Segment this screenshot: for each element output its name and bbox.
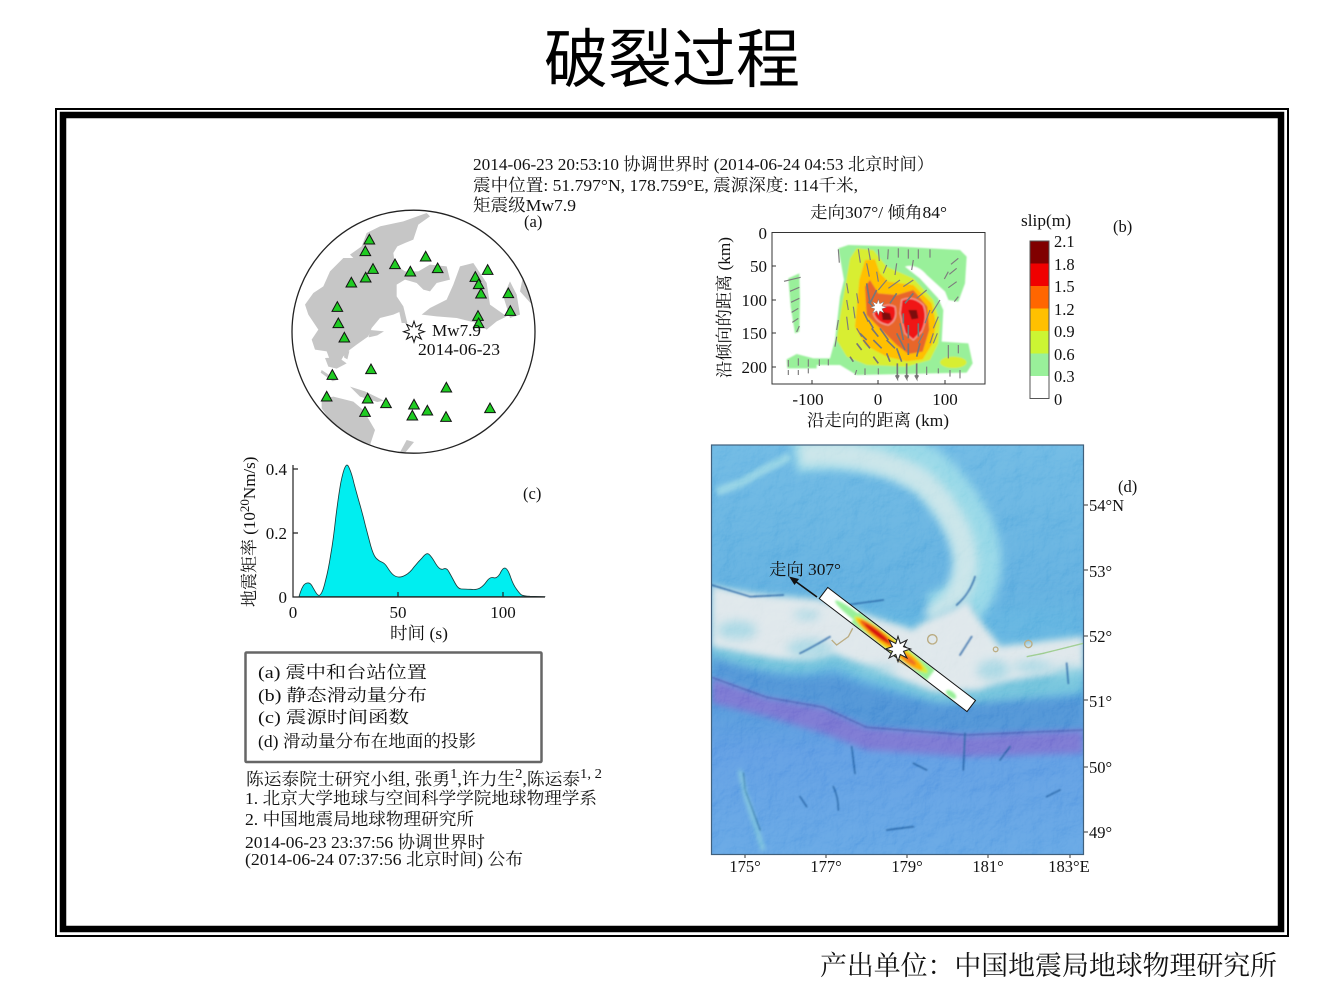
slip plot axes — [715, 224, 985, 430]
icon: epicenter star on strip — [885, 636, 911, 662]
axis labels: 100 — [490, 603, 516, 622]
slip colour legend: 0 — [1054, 390, 1062, 409]
author credits — [245, 767, 602, 869]
axis labels: 0.2 — [266, 524, 287, 543]
title: 破裂过程 — [544, 9, 800, 101]
axis labels: 50 — [390, 603, 406, 622]
axis labels: 0 — [289, 603, 297, 622]
aleutian shelf — [712, 585, 1083, 692]
slip plot axes: 沿走向的距离 (km) — [807, 411, 949, 430]
slip colour legend — [1021, 211, 1075, 409]
slip plot axes: 沿倾向的距离 (km) — [715, 237, 734, 378]
panel a: epicenter and station map — [292, 210, 542, 455]
legend box: panel descriptions — [246, 652, 542, 762]
axis labels — [237, 457, 516, 643]
event information text: 震中位置: 51.797°N, 178.759°E, 震源深度: 114千米, — [473, 176, 858, 195]
event information text — [473, 155, 934, 215]
author credits: (2014-06-24 07:37:56 北京时间) 公布 — [245, 850, 523, 869]
author credits: ,陈运泰 — [522, 770, 580, 789]
map axis labels: 179° — [891, 857, 923, 876]
legend box: panel descriptions: (d) 滑动量分布在地面的投影 — [258, 731, 476, 751]
time axes — [293, 465, 545, 597]
map axis labels: 54°N — [1089, 496, 1124, 515]
outer frame — [56, 109, 1288, 936]
map axis labels: 52° — [1089, 627, 1112, 646]
deep blue shelf foot — [712, 657, 1083, 735]
author credits: ,许力生 — [457, 770, 515, 789]
slip contour plot — [784, 245, 973, 378]
slip colour legend: 0.6 — [1054, 345, 1075, 364]
slip colour legend: 2.1 — [1054, 232, 1075, 251]
epicenter star in slip plot — [870, 299, 886, 315]
epicenter label — [418, 321, 500, 359]
shelf halo — [712, 598, 1083, 706]
hillshade relief overlay — [712, 445, 1083, 854]
slip colour legend: 0.3 — [1054, 367, 1075, 386]
slip colour legend: 1.8 — [1054, 255, 1075, 274]
panel label b: (b) — [1113, 217, 1132, 236]
author credits: 2014-06-23 23:37:56 协调世界时 — [245, 833, 485, 852]
author credits: 1 — [450, 767, 457, 782]
slip plot axes: 0 — [758, 224, 767, 243]
islands — [831, 628, 1083, 670]
fault slip projection strip — [819, 587, 976, 712]
moment rate area curve — [299, 465, 545, 597]
map axis labels: 51° — [1089, 692, 1112, 711]
epicenter label: 2014-06-23 — [418, 340, 500, 359]
globe — [292, 210, 538, 455]
strike label: 走向 307° — [769, 560, 841, 579]
slip colour legend: 1.5 — [1054, 277, 1075, 296]
author credits: 1. 北京大学地球与空间科学学院地球物理学系 — [245, 789, 597, 808]
icon: epicenter star — [404, 321, 424, 342]
land masses — [305, 213, 538, 455]
epicenter label: Mw7.9 — [432, 321, 481, 340]
panel c: source time function — [237, 457, 545, 643]
panel label a: (a) — [524, 212, 542, 231]
legend box: panel descriptions: (c) 震源时间函数 — [258, 708, 409, 727]
slip plot axes: 0 — [874, 390, 882, 409]
dark seafloor features — [712, 577, 1068, 830]
panel d: slip projection on bathymetric map — [712, 445, 1137, 876]
map axis labels — [729, 496, 1124, 876]
slip colour legend: 1.2 — [1054, 300, 1075, 319]
axis labels: 20 — [237, 499, 252, 512]
map axis labels: 181° — [972, 857, 1004, 876]
axis labels: Nm/s) — [240, 457, 259, 499]
slip vectors — [784, 248, 960, 378]
slip plot axes: 100 — [742, 291, 767, 310]
slip colour legend: slip(m) — [1021, 211, 1071, 230]
author credits: 2. 中国地震局地球物理研究所 — [245, 810, 474, 829]
slip plot axes: 150 — [742, 324, 767, 343]
event information text: 2014-06-23 20:53:10 协调世界时 (2014-06-24 04:53 北京时间） — [473, 155, 934, 174]
slip plot axes: 200 — [742, 358, 767, 377]
axis labels: 地震矩率 (10 — [240, 512, 259, 607]
panel label c: (c) — [523, 484, 541, 503]
axis labels: 时间 (s) — [390, 624, 448, 643]
producer credit footer: 产出单位：中国地震局地球物理研究所 — [820, 951, 1277, 981]
map axis labels: 175° — [729, 857, 761, 876]
panel b title: 走向307°/ 倾角84° — [810, 203, 947, 222]
shelf textures — [717, 610, 1087, 682]
panel b: static slip distribution — [715, 203, 1132, 430]
ridge ring — [793, 446, 978, 617]
author credits: 1, 2 — [580, 767, 602, 782]
legend box: panel descriptions: (a) 震中和台站位置 — [258, 663, 427, 682]
map axis labels: 177° — [810, 857, 842, 876]
purple trench — [712, 677, 1083, 757]
author credits: 2 — [515, 767, 522, 782]
slip plot axes: 100 — [932, 390, 958, 409]
map axis labels: 50° — [1089, 758, 1112, 777]
slip plot axes: -100 — [792, 390, 824, 409]
seismic station triangles — [321, 234, 516, 421]
axis labels: 0.4 — [266, 460, 288, 479]
arrow: strike direction — [789, 576, 817, 597]
legend box: panel descriptions: (b) 静态滑动量分布 — [258, 686, 427, 705]
event information text: 矩震级Mw7.9 — [473, 196, 576, 215]
slip plot axes: 50 — [750, 257, 767, 276]
axis labels: 0 — [278, 588, 287, 607]
bathymetry map — [712, 445, 1087, 854]
panel label d: (d) — [1118, 477, 1137, 496]
map axis labels: 183°E — [1048, 857, 1090, 876]
map axis labels: 53° — [1089, 562, 1112, 581]
author credits: 陈运泰院士研究小组, 张勇 — [246, 770, 442, 789]
map axis labels: 49° — [1089, 823, 1112, 842]
slip colour legend: 0.9 — [1054, 322, 1075, 341]
